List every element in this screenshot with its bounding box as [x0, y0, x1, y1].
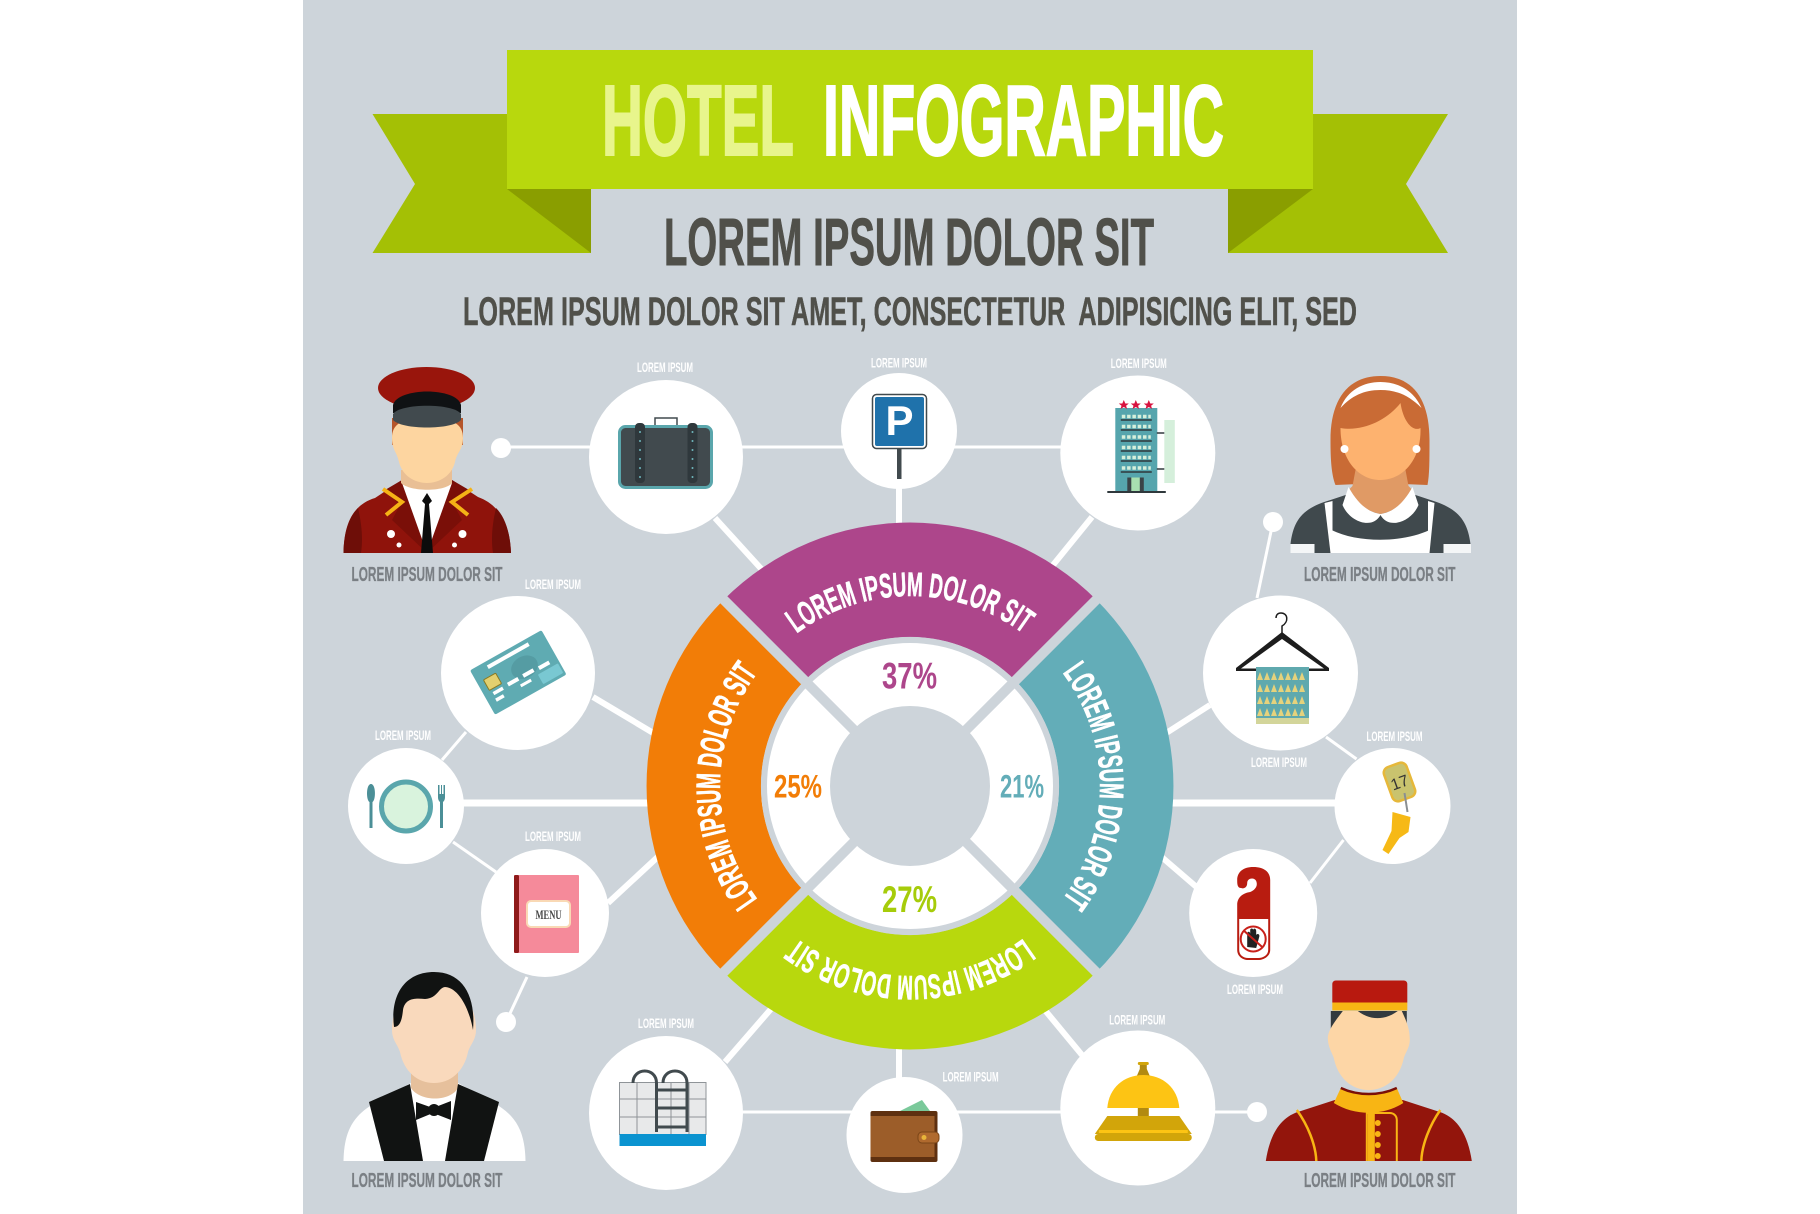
segment: orange	[647, 600, 805, 972]
small node labels: LOREM IPSUM	[637, 359, 693, 375]
small node labels: LOREM IPSUM	[871, 354, 927, 370]
icon: room key: 17	[1389, 772, 1411, 794]
icon: parking sign	[872, 394, 926, 479]
icon: plate and cutlery	[367, 782, 445, 831]
title text: INFOGRAPHIC	[823, 65, 1224, 177]
icon: suitcase	[620, 418, 712, 488]
person: doorman	[344, 367, 511, 553]
person: bellboy	[1266, 980, 1472, 1161]
label: bellboy: LOREM IPSUM DOLOR SIT	[1304, 1170, 1456, 1192]
title text	[602, 65, 1224, 177]
background panel	[303, 0, 1517, 1214]
icon: menu book	[514, 875, 579, 953]
title text: HOTEL	[602, 65, 794, 177]
small node labels: LOREM IPSUM	[1366, 728, 1422, 744]
donut chart	[646, 522, 1174, 1050]
subtitle: LOREM IPSUM DOLOR SIT	[664, 205, 1154, 280]
percentages: 25%	[774, 768, 822, 804]
percentages: 21%	[1000, 768, 1044, 804]
icon: menu book: MENU	[536, 908, 562, 922]
connector dots	[491, 438, 1283, 1122]
icon: wallet	[870, 1100, 939, 1162]
title banner	[372, 50, 1448, 253]
small node labels: LOREM IPSUM	[638, 1015, 694, 1031]
small node labels: LOREM IPSUM	[1251, 754, 1307, 770]
icon: credit card	[470, 630, 566, 715]
label: maid: LOREM IPSUM DOLOR SIT	[1304, 564, 1456, 586]
small node labels: LOREM IPSUM	[1227, 981, 1283, 997]
segment labels: LOREM IPSUM DOLOR SIT	[783, 938, 1036, 1000]
segment: green	[724, 891, 1096, 1049]
percentages	[774, 656, 1044, 920]
segment labels	[696, 530, 1150, 1040]
icon: hanger with towel	[1236, 613, 1329, 724]
percentages: 27%	[882, 879, 937, 920]
icon: reception bell	[1095, 1062, 1192, 1141]
label: doorman: LOREM IPSUM DOLOR SIT	[352, 564, 502, 586]
percentages: 37%	[882, 656, 937, 696]
node circles	[348, 373, 1450, 1193]
person: maid	[1290, 376, 1471, 553]
segment: teal	[1015, 600, 1173, 972]
person: waiter	[344, 972, 526, 1161]
small node labels: LOREM IPSUM	[1109, 1012, 1165, 1028]
label: waiter: LOREM IPSUM DOLOR SIT	[352, 1170, 502, 1192]
small node labels	[375, 354, 1422, 1084]
small node labels: LOREM IPSUM	[1111, 355, 1167, 371]
small node labels: LOREM IPSUM	[375, 727, 431, 743]
icon: room key	[1382, 761, 1417, 854]
icon: hotel building	[1107, 400, 1175, 493]
segment labels: LOREM IPSUM DOLOR SIT	[784, 572, 1037, 634]
connector network	[406, 447, 1392, 1112]
icon: parking sign: P	[885, 397, 914, 444]
small node labels: LOREM IPSUM	[525, 828, 581, 844]
icon: do not disturb door hanger	[1237, 867, 1270, 960]
segment: purple	[724, 523, 1096, 681]
segment labels: LOREM IPSUM DOLOR SIT	[696, 659, 758, 912]
segment labels: LOREM IPSUM DOLOR SIT	[1062, 660, 1124, 913]
icon: pool with ladder	[619, 1071, 706, 1146]
small node labels: LOREM IPSUM	[525, 576, 581, 592]
small node labels: LOREM IPSUM	[943, 1068, 999, 1084]
